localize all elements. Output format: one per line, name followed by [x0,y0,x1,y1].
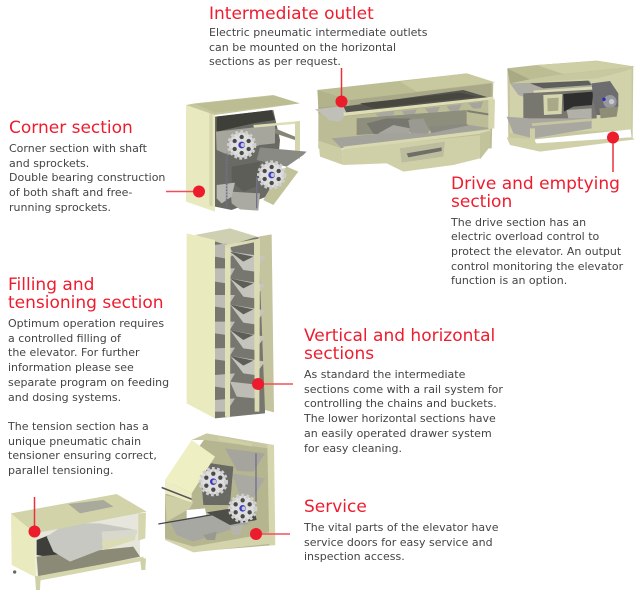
illustration: drive and emptying section [507,61,635,152]
icon: lower sprocket [259,162,284,188]
text: service: service doors for easy service and [304,536,493,549]
text: vertical and horizontal sections: sections come with a rail system for [304,383,503,396]
heading: corner section: Corner section [9,118,133,138]
text: corner section: of both shaft and free- [9,186,132,199]
illustration: corner section [186,95,307,212]
text: drive section [450,216,624,287]
text: intermediate outlet: Electric pneumatic intermediate outlets [209,26,427,39]
text: corner section: and sprockets. [9,157,89,170]
icon: upper sprocket [229,132,254,158]
text: vertical and horizontal sections [304,368,503,455]
text: drive section: function is an option. [451,274,567,287]
chain: left [224,153,229,208]
icon: lower sprocket [230,496,255,521]
illustration: vertical section [187,228,274,418]
callout: filling section marker [28,497,40,538]
text: corner section [9,142,165,214]
heading: drive and emptying section: Drive and emptying [451,174,620,194]
text: corner section: running sprockets. [9,201,111,214]
illustration: intermediate outlet section [315,73,495,172]
text: drive section: protect the elevator. An output [451,245,621,258]
text: filling and tensioning [8,317,169,477]
text: filling and tensioning: unique pneumatic chain [8,435,141,448]
text: filling and tensioning: separate program on feeding [8,376,169,389]
chain: right [255,177,259,208]
text: service: inspection access. [304,550,405,563]
text: filling and tensioning: a controlled filling of [8,332,121,345]
heading: vertical and horizontal sections: sections [304,344,374,364]
heading: drive and emptying section: section [451,192,512,212]
text: filling and tensioning: the elevator. For further [8,346,140,359]
text: vertical and horizontal sections: controlling the chains and buckets. [304,397,497,410]
text: drive section: electric overload control to [451,230,599,243]
text: intermediate outlet: sections as per request. [209,55,341,68]
text: corner section: Double bearing construction [9,171,165,184]
text: filling and tensioning: and dosing systems. [8,391,121,404]
icon: upper sprocket [201,469,226,494]
text: filling and tensioning: tensioner ensuring correct, [8,449,157,462]
callout: drive section marker [607,132,619,172]
callout: service section marker [250,528,290,540]
callout: corner section marker [166,186,205,198]
callout: intermediate outlet marker [336,68,348,108]
callout: vertical section marker [252,378,293,390]
text: service: The vital parts of the elevator have [304,521,498,534]
illustration: service section [158,433,275,552]
heading: filling and tensioning section: tensioning section [8,293,164,313]
text: corner section: Corner section with shaft [9,142,147,155]
text: vertical and horizontal sections: an easily operated drawer system [304,427,492,440]
heading: intermediate outlet: Intermediate outlet [209,4,374,24]
heading: filling and tensioning section: Filling and [8,275,94,295]
text: intermediate outlet: can be mounted on the horizontal [209,41,396,54]
heading: vertical and horizontal sections: Vertical and horizontal [304,326,495,346]
heading: drive and emptying section [451,174,620,212]
text: filling and tensioning: Optimum operation requires [8,317,164,330]
heading: filling and tensioning section [8,275,164,313]
text: vertical and horizontal sections: for easy cleaning. [304,442,402,455]
text: intermediate outlet [209,26,427,68]
text: drive section: The drive section has an [451,216,586,228]
text: filling and tensioning: information please see [8,361,134,374]
text: filling and tensioning: The tension section has a [8,420,149,433]
illustration: filling and tensioning section [11,494,147,590]
text: vertical and horizontal sections: As standard the intermediate [304,368,465,381]
chain: right [254,453,258,502]
heading: vertical and horizontal sections [304,326,495,364]
text: service [304,521,498,563]
text: drive section: control monitoring the elevator [451,260,623,273]
heading: service: Service [304,497,367,517]
text: vertical and horizontal sections: The lower horizontal sections have [304,412,496,425]
text: filling and tensioning: parallel tensioning. [8,464,113,477]
